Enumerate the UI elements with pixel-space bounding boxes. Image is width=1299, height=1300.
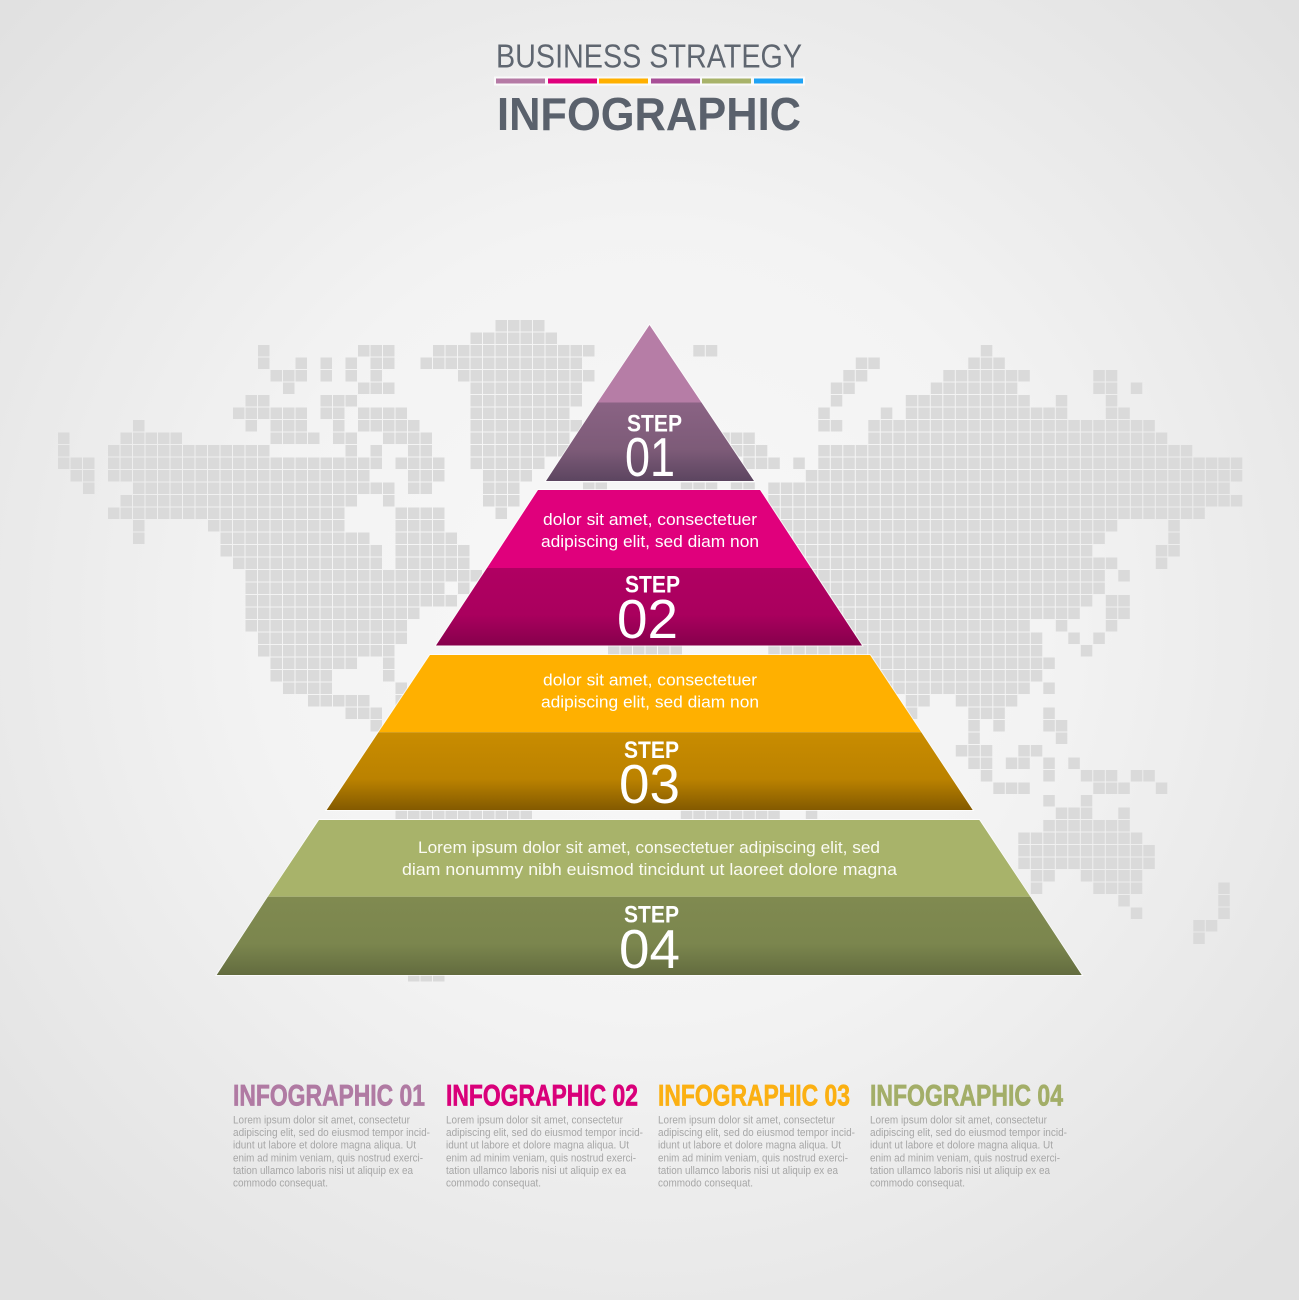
- column: infographic 01: adipiscing elit, sed do eiusmod tempor incid-: [233, 1127, 430, 1139]
- column: infographic 02: [446, 1080, 643, 1190]
- column: infographic 03: Lorem ipsum dolor sit amet, consectetur: [658, 1114, 835, 1126]
- column: infographic 03: idunt ut labore et dolore magna aliqua. Ut: [658, 1140, 841, 1152]
- tier: step 02: adipiscing elit, sed diam non: [541, 533, 759, 551]
- tier: step 01: STEP: [627, 410, 682, 438]
- column: infographic 01: idunt ut labore et dolore magna aliqua. Ut: [233, 1140, 416, 1152]
- column: infographic 02: enim ad minim veniam, quis nostrud exerci-: [446, 1152, 636, 1164]
- tier: step 04: [217, 820, 1082, 980]
- tier: step 03: STEP: [624, 737, 679, 764]
- column: infographic 01: tation ullamco laboris nisi ut aliquip ex ea: [233, 1165, 414, 1177]
- pixel world map: [58, 326, 1243, 976]
- title block: [494, 38, 805, 140]
- tier: step 02: [436, 490, 862, 650]
- column: infographic 03: enim ad minim veniam, quis nostrud exerci-: [658, 1152, 848, 1164]
- tier: step 02: STEP: [625, 572, 680, 598]
- pyramid: [217, 325, 1082, 980]
- column: infographic 04: adipiscing elit, sed do eiusmod tempor incid-: [870, 1127, 1067, 1139]
- column: infographic 02: tation ullamco laboris nisi ut aliquip ex ea: [446, 1165, 627, 1177]
- tier: step 01: 01: [625, 426, 675, 488]
- tier: step 04: 04: [619, 918, 680, 980]
- column: infographic 04: Lorem ipsum dolor sit amet, consectetur: [870, 1114, 1047, 1126]
- column: infographic 04: idunt ut labore et dolore magna aliqua. Ut: [870, 1140, 1053, 1152]
- tier: step 03: 03: [619, 753, 680, 815]
- column: infographic 04: commodo consequat.: [870, 1178, 965, 1190]
- column: infographic 03: [658, 1080, 855, 1190]
- column: infographic 02: Lorem ipsum dolor sit amet, consectetur: [446, 1114, 623, 1126]
- column: infographic 02: INFOGRAPHIC 02: [446, 1080, 638, 1113]
- tier: step 03: dolor sit amet, consectetuer: [543, 672, 758, 690]
- title: infographic: INFOGRAPHIC: [497, 88, 801, 140]
- column: infographic 02: commodo consequat.: [446, 1178, 541, 1190]
- column: infographic 01: INFOGRAPHIC 01: [233, 1080, 425, 1113]
- column: infographic 04: INFOGRAPHIC 04: [870, 1080, 1063, 1113]
- column: infographic 01: commodo consequat.: [233, 1178, 328, 1190]
- column: infographic 03: commodo consequat.: [658, 1178, 753, 1190]
- column: infographic 01: [233, 1080, 430, 1190]
- title: business strategy: BUSINESS STRATEGY: [496, 38, 802, 74]
- column: infographic 02: idunt ut labore et dolore magna aliqua. Ut: [446, 1140, 629, 1152]
- tier: step 03: adipiscing elit, sed diam non: [541, 694, 759, 712]
- tier: step 04: diam nonummy nibh euismod tincidunt ut laoreet dolore magna: [402, 861, 898, 879]
- column: infographic 03: adipiscing elit, sed do eiusmod tempor incid-: [658, 1127, 855, 1139]
- tier: step 03: [327, 655, 973, 815]
- column: infographic 01: Lorem ipsum dolor sit amet, consectetur: [233, 1114, 410, 1126]
- tier: step 02: 02: [617, 588, 678, 650]
- column: infographic 04: tation ullamco laboris nisi ut aliquip ex ea: [870, 1165, 1051, 1177]
- map: americas and greenland: [58, 326, 683, 976]
- column: infographic 03: tation ullamco laboris nisi ut aliquip ex ea: [658, 1165, 839, 1177]
- column: infographic 04: [870, 1080, 1067, 1190]
- tier: step 01: [546, 325, 754, 488]
- column: infographic 04: enim ad minim veniam, quis nostrud exerci-: [870, 1152, 1060, 1164]
- map: eurasia and australia: [681, 351, 1243, 938]
- column: infographic 03: INFOGRAPHIC 03: [658, 1080, 850, 1113]
- title colour stripes: [494, 76, 805, 86]
- tier: step 04: STEP: [624, 902, 679, 929]
- tier: step 04: Lorem ipsum dolor sit amet, consectetuer adipiscing elit, sed: [418, 839, 880, 857]
- bottom text columns: [233, 1080, 1067, 1190]
- tier: step 02: dolor sit amet, consectetuer: [543, 511, 758, 529]
- column: infographic 02: adipiscing elit, sed do eiusmod tempor incid-: [446, 1127, 643, 1139]
- column: infographic 01: enim ad minim veniam, quis nostrud exerci-: [233, 1152, 423, 1164]
